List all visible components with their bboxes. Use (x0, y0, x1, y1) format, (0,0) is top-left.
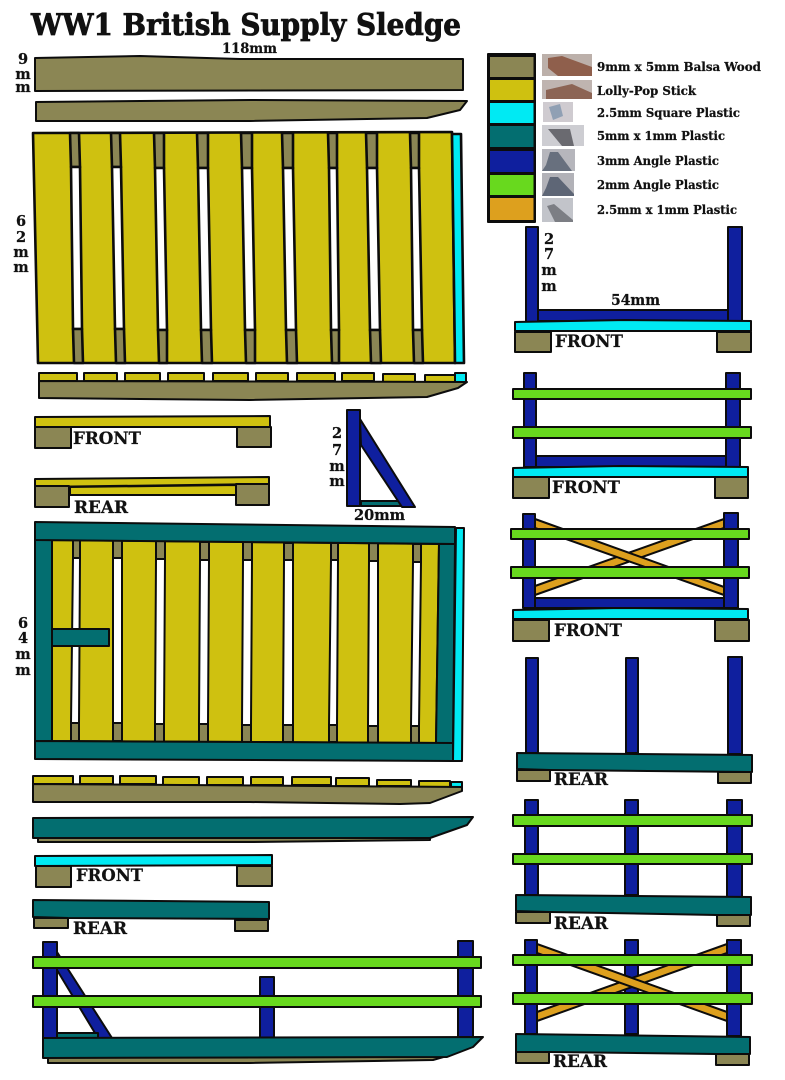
legend: material labels: 3mm Angle Plastic (597, 154, 719, 168)
legend: material labels: Lolly-Pop Stick (597, 84, 697, 98)
deck top view: lolly-pop sticks on runners (33, 132, 464, 363)
dimension: 27mm upright height: 2 (544, 231, 554, 248)
end view: FRONT with square plastic: FRONT (76, 866, 144, 885)
side brace triangle (347, 410, 415, 507)
dimension: 64mm: m (15, 646, 31, 663)
dimension: 62mm: 6 (16, 213, 26, 230)
legend: material labels: 5mm x 1mm Plastic (597, 129, 725, 143)
rear frame with rails and cross bracing (513, 940, 752, 1071)
rear frame with green rails: REAR (554, 914, 608, 933)
body frame top view: plastic frame over sticks (35, 522, 464, 761)
legend: material labels: 2.5mm Square Plastic (597, 106, 740, 120)
dimension: 64mm: 4 (18, 630, 28, 647)
end view: FRONT with square plastic (35, 855, 272, 887)
end view: FRONT deck (35, 416, 271, 448)
dimension: 27mm upright height: m (541, 278, 557, 295)
dimension: 20mm: 20mm (354, 507, 406, 524)
dimension: 9mm: 9 (18, 51, 28, 68)
dimension: 27mm brace height (329, 425, 345, 490)
dimension: 64mm: 6 (18, 615, 28, 632)
dimension: 27mm brace height: 2 (332, 425, 342, 442)
dimension: 64mm (15, 615, 31, 679)
dimension: 9mm (15, 51, 31, 96)
front frame with rails and cross bracing (511, 513, 749, 641)
dimension: 9mm: m (15, 66, 31, 83)
dimension: 27mm upright height (541, 231, 557, 295)
dimension: 27mm brace height: 7 (332, 442, 342, 459)
dimension: 27mm upright height: m (541, 262, 557, 279)
dimension: 27mm brace height: m (329, 473, 345, 490)
rear frame with green rails (513, 800, 752, 933)
balsa runner top view (35, 56, 463, 91)
title: WW1 British Supply Sledge (30, 8, 461, 43)
rear frame: three uprights (517, 657, 752, 789)
legend: material colour swatches (488, 54, 535, 222)
dimension: 62mm: m (13, 244, 29, 261)
dimension: 62mm: 2 (16, 229, 26, 246)
completed side elevation (33, 941, 483, 1063)
legend: material labels (597, 60, 762, 217)
legend: material photos (542, 54, 592, 222)
dimension: 27mm brace height: m (329, 458, 345, 475)
dimension: 62mm: m (13, 259, 29, 276)
front frame with rails and cross bracing: FRONT (554, 621, 623, 640)
dimension: 9mm: m (15, 79, 31, 96)
dimension: 118mm: 118mm (222, 41, 277, 57)
front frame: uprights and crossbar: FRONT (555, 332, 624, 351)
dimension: 64mm: m (15, 662, 31, 679)
balsa runner side view (36, 100, 467, 121)
front frame with green rails (513, 373, 751, 498)
body side view with slats (33, 776, 462, 804)
rear frame: three uprights: REAR (554, 770, 608, 789)
legend: material labels: 9mm x 5mm Balsa Wood (597, 60, 762, 74)
dimension: 27mm upright height: 7 (544, 246, 554, 263)
end view: REAR with teal plastic (33, 900, 269, 938)
deck side view (39, 373, 467, 400)
front frame: uprights and crossbar (515, 227, 751, 352)
legend: material labels: 2.5mm x 1mm Plastic (597, 203, 737, 217)
end view: REAR deck: REAR (74, 498, 128, 517)
end view: REAR deck (35, 477, 269, 517)
front frame with green rails: FRONT (552, 478, 621, 497)
legend: material labels: 2mm Angle Plastic (597, 178, 719, 192)
end view: FRONT deck: FRONT (73, 429, 142, 448)
dimension: 62mm (13, 213, 29, 276)
rear frame with rails and cross bracing: REAR (553, 1052, 607, 1071)
dimension: 54mm: 54mm (611, 292, 661, 309)
end view: REAR with teal plastic: REAR (73, 919, 127, 938)
teal side panel over runner (33, 817, 473, 842)
